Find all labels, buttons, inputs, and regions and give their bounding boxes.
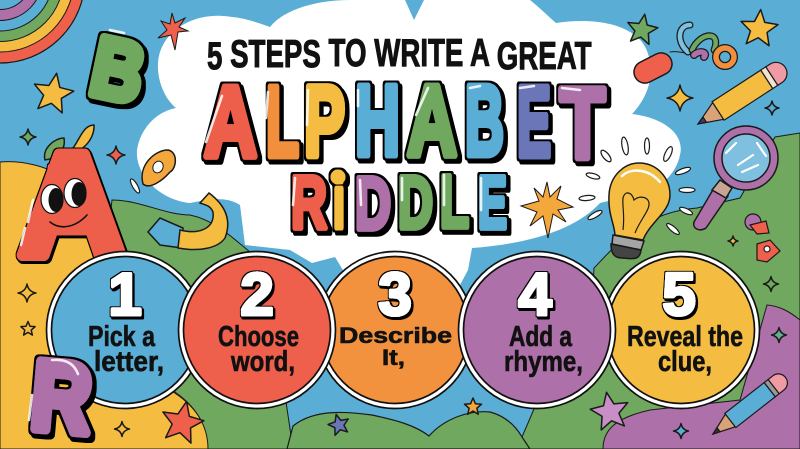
shine [21, 200, 33, 245]
title ALPHABET [204, 65, 605, 180]
heading: GREAT [497, 34, 592, 78]
letter B gloss [110, 30, 124, 33]
letter O ring [142, 150, 175, 186]
letter body: A [19, 123, 124, 286]
step 4 circle: 4 [518, 261, 552, 328]
white dash [129, 178, 141, 194]
small sparkle [728, 236, 738, 246]
rainbow [0, 0, 85, 63]
red star bottom [158, 397, 207, 445]
step 1 circle: Pick a [88, 321, 156, 353]
face [41, 178, 87, 227]
step 3 circle: 3 [378, 261, 412, 328]
blue sparkle right [765, 101, 779, 115]
squiggle letters [670, 25, 716, 57]
curled yellow letter [148, 193, 228, 250]
heading: TO [329, 31, 374, 75]
step 3 circle [316, 252, 474, 408]
title ALPHABET: L [266, 66, 299, 178]
title RIDDLE: i [333, 161, 345, 244]
step 5 circle: clue, [658, 346, 712, 378]
green ground right [522, 133, 800, 449]
title RIDDLE: L [440, 160, 469, 243]
bottom green mound [287, 412, 530, 449]
magnifying glass [694, 126, 778, 230]
heading: STEPS [230, 32, 329, 76]
title gloss highlights [206, 86, 580, 210]
step 4 circle [458, 252, 616, 408]
purple star bottom [588, 389, 632, 431]
title ALPHABET: T [560, 68, 605, 180]
step 2 circle [178, 252, 336, 408]
step 3 circle: Describe [339, 323, 452, 348]
sparkle green [20, 129, 36, 145]
spark red [158, 13, 188, 50]
title ALPHABET: E [517, 66, 551, 178]
purple hill right [603, 305, 800, 449]
green hill centre-left [100, 200, 320, 449]
sparkle red [107, 146, 125, 164]
cloud [137, 0, 681, 285]
yellow star top right [739, 8, 779, 46]
green sparkle right [764, 276, 778, 292]
orange star bottom [464, 398, 482, 414]
yellow pencil [692, 58, 791, 133]
title ALPHABET: H [355, 65, 400, 177]
outline sparkle bottom [114, 422, 130, 436]
step 2 circle: 2 [240, 261, 274, 328]
outline star left [21, 322, 35, 335]
light rays [579, 137, 695, 236]
title RIDDLE: D [398, 161, 433, 244]
yellow sparkle [667, 85, 693, 111]
orange ring [716, 48, 734, 66]
letter B: B [83, 20, 152, 122]
heading: 5 [207, 34, 222, 78]
step 1 circle [46, 252, 204, 408]
step 2 circle: word, [230, 346, 295, 378]
light bulb [609, 163, 670, 259]
step 5 circle: Reveal the [627, 321, 743, 353]
teal sparkle right [772, 328, 786, 342]
mascot letter A [19, 123, 124, 286]
outline sparkle left [18, 284, 36, 302]
title ALPHABET: A [204, 66, 257, 178]
step 4 circle: Add a [509, 321, 573, 353]
red doodles [745, 214, 780, 262]
green star top right [625, 12, 660, 45]
step 1 circle: 1 [108, 261, 142, 328]
title ALPHABET: P [304, 66, 345, 178]
title ALPHABET: A [407, 65, 457, 177]
title RIDDLE: D [355, 162, 391, 245]
yellow hill left [0, 162, 209, 449]
heading: WRITE A [374, 31, 489, 75]
step 1 circle: letter, [94, 346, 164, 378]
blue star bottom [326, 412, 351, 436]
title RIDDLE: R [291, 161, 327, 244]
letter R gloss [29, 360, 78, 420]
title RIDDLE: E [478, 161, 507, 244]
blue pencil [707, 370, 791, 441]
title ALPHABET: B [465, 65, 504, 177]
step 4 circle: rhyme, [504, 346, 583, 378]
blue sparkle bottom [674, 424, 688, 438]
step 2 circle: Choose [218, 321, 299, 353]
step 5 circle: 5 [662, 261, 696, 328]
red capsule [630, 49, 676, 87]
title RIDDLE [291, 160, 507, 245]
leaves [45, 125, 94, 160]
step 3 circle: It, [382, 345, 405, 370]
starburst [521, 182, 573, 238]
step 5 circle [602, 252, 760, 408]
star yellow left [30, 70, 76, 114]
